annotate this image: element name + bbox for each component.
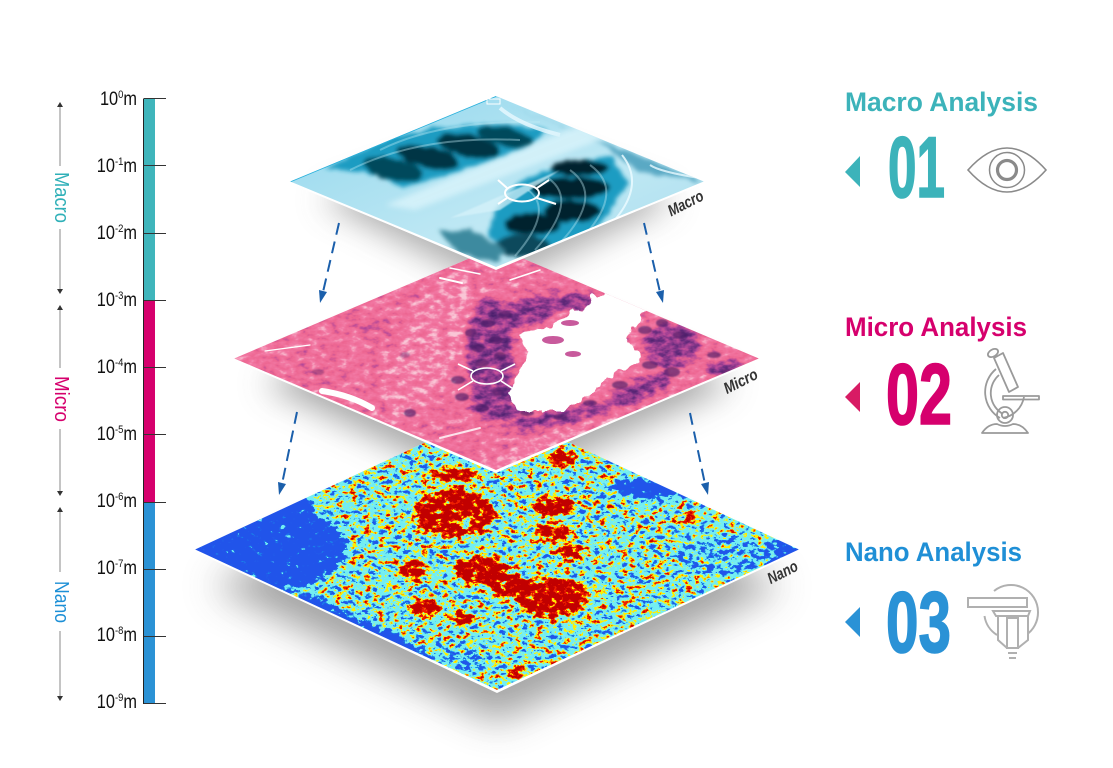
scale labels: m (123, 624, 137, 645)
icon: microscope (982, 347, 1039, 433)
scale labels: 10 (97, 289, 115, 310)
scale labels: 10 (97, 222, 115, 243)
arrow: macro to micro right (644, 223, 664, 303)
layer: micro tissue (234, 258, 759, 473)
layer: nano heat map (194, 442, 800, 693)
shadow: micro layer (262, 285, 734, 494)
scale labels: 10 (97, 356, 115, 377)
heading: Micro Analysis (845, 312, 1027, 342)
scale labels: m (123, 155, 137, 176)
heading: Nano Analysis (845, 537, 1022, 567)
scale labels: m (123, 88, 137, 109)
section: nano analysis (845, 537, 1038, 671)
scale labels: -1 (115, 156, 124, 168)
icon: eye (968, 148, 1046, 192)
scale labels: -5 (115, 424, 124, 436)
scale labels: -4 (115, 357, 124, 369)
cell fragments (542, 320, 581, 357)
target marker: micro (458, 364, 515, 390)
shadow: nano layer (212, 455, 782, 722)
number: 02 (886, 347, 952, 443)
scale bar (144, 98, 166, 704)
scale labels: 0 (118, 89, 124, 101)
scale labels: m (123, 691, 137, 712)
scale labels: -9 (115, 692, 124, 704)
icon: electron microscope (968, 585, 1038, 658)
tissue nuclei and lumen (265, 268, 735, 438)
pointer (845, 607, 860, 637)
range: micro: Micro (50, 376, 72, 422)
scale labels: -8 (115, 625, 124, 637)
lungs (325, 102, 705, 262)
scale labels: m (123, 356, 137, 377)
range: macro: Macro (50, 172, 72, 223)
layer label: Micro: Micro (721, 366, 761, 398)
scale labels (97, 88, 137, 712)
target marker: macro (498, 180, 556, 204)
heading: Macro Analysis (845, 87, 1038, 117)
arrow: micro to nano left (278, 412, 297, 495)
scale labels: 10 (97, 624, 115, 645)
macro edge highlight (289, 182, 705, 268)
scale labels: m (123, 557, 137, 578)
scale labels: 10 (97, 423, 115, 444)
scale labels: -7 (115, 558, 124, 570)
scale labels: m (123, 289, 137, 310)
pointer (845, 156, 860, 187)
top-left edge (289, 96, 496, 182)
layer label: Nano: Nano (765, 558, 801, 588)
scale labels: m (123, 490, 137, 511)
range: nano (50, 507, 72, 701)
ribs (350, 108, 700, 256)
range: nano: Nano (50, 581, 72, 623)
section: micro analysis (845, 312, 1039, 443)
section: macro analysis (845, 87, 1046, 216)
pointer (845, 382, 860, 412)
range: macro (50, 102, 72, 294)
film marker (487, 99, 500, 104)
scale labels: -6 (115, 491, 124, 503)
scale labels: m (123, 423, 137, 444)
arrow: macro to micro left (319, 223, 339, 303)
number: 03 (886, 575, 951, 671)
heat map texture (194, 442, 800, 690)
tissue texture (234, 258, 759, 470)
scale labels: -3 (115, 290, 124, 302)
scale labels: 10 (97, 691, 115, 712)
layer: macro x-ray (285, 92, 710, 272)
scale labels: m (123, 222, 137, 243)
scale labels: 10 (97, 155, 115, 176)
arrow: micro to nano right (690, 413, 709, 495)
scale labels: 10 (97, 490, 115, 511)
layer label: Macro: Macro (665, 188, 707, 220)
white fibres (265, 268, 540, 438)
scale labels: 10 (100, 88, 118, 109)
shadow: macro layer (320, 135, 676, 290)
spine (385, 125, 605, 210)
scale labels: 10 (97, 557, 115, 578)
micro edge highlight (233, 359, 760, 471)
edge highlights (194, 550, 800, 691)
number: 01 (888, 120, 945, 216)
scale labels: -2 (115, 223, 124, 235)
lumen (509, 290, 648, 411)
range: micro (50, 305, 72, 496)
